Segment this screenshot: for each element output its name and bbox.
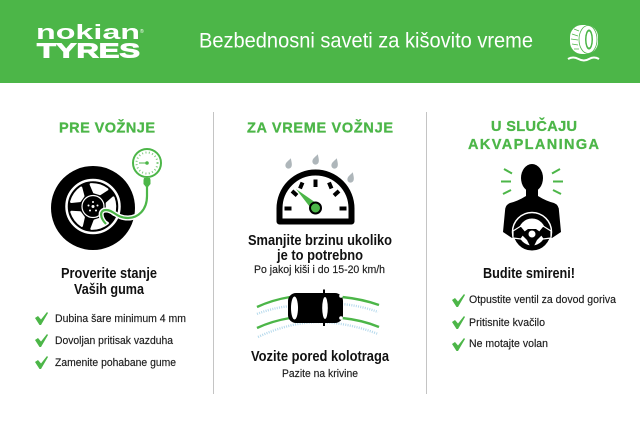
text: check your tyres: Proverite stanje bbox=[61, 265, 157, 282]
checklist: Dubina šare minimum 4 mm bbox=[55, 313, 186, 325]
text: check your tyres: Vaših guma bbox=[74, 281, 145, 298]
checklist: Otpustite ventil za dovod goriva bbox=[469, 294, 617, 306]
icon: tyre on water bbox=[568, 25, 599, 60]
text: reduce speed: je to potrebno bbox=[276, 247, 363, 264]
checklist bbox=[452, 294, 617, 351]
panel: before driving bbox=[35, 118, 186, 369]
icon: wheel with pressure gauge bbox=[51, 149, 161, 250]
checklist: Ne motajte volan bbox=[469, 338, 548, 350]
text: reduce speed bbox=[248, 232, 392, 276]
logo: Nokian Tyres: TYRES bbox=[37, 40, 140, 62]
heading: ZA VREME VOŽNJE: ZA VREME VOŽNJE bbox=[247, 118, 393, 136]
checklist: Zamenite pohabane gume bbox=[55, 357, 176, 369]
logo: Nokian Tyres: nokian bbox=[36, 22, 140, 44]
heading: U SLUČAJU AKVAPLANINGA: U SLUČAJU bbox=[491, 117, 577, 135]
panel: while driving bbox=[247, 118, 393, 380]
icon: driver holding steering wheel bbox=[501, 164, 563, 252]
heading: U SLUČAJU AKVAPLANINGA: AKVAPLANINGA bbox=[468, 137, 600, 153]
text: drive beside the ruts bbox=[251, 348, 390, 380]
heading: U SLUČAJU AKVAPLANINGA bbox=[468, 117, 600, 153]
text: check your tyres bbox=[61, 265, 157, 298]
text: stay calm: Budite smireni! bbox=[483, 265, 575, 282]
logo: Nokian Tyres bbox=[36, 22, 144, 62]
icon: car between wheel ruts bbox=[257, 290, 379, 337]
column dividers bbox=[214, 112, 426, 394]
checklist bbox=[35, 312, 186, 369]
header band bbox=[0, 0, 640, 83]
icon: speedometer with rain drops bbox=[280, 153, 356, 222]
text: reduce speed: Po jakoj kiši i do 15-20 km/h bbox=[254, 264, 385, 276]
checklist: Pritisnite kvačilo bbox=[469, 317, 545, 329]
text: drive beside the ruts: Pazite na krivine bbox=[282, 368, 358, 380]
heading: PRE VOŽNJE: PRE VOŽNJE bbox=[59, 118, 155, 136]
checklist: Dovoljan pritisak vazduha bbox=[55, 335, 174, 347]
text: drive beside the ruts: Vozite pored kolotraga bbox=[251, 348, 390, 365]
text: reduce speed: Smanjite brzinu ukoliko bbox=[248, 232, 392, 249]
logo: Nokian Tyres: ® bbox=[140, 28, 144, 35]
header title: Bezbednosni saveti za kišovito vreme bbox=[199, 30, 533, 52]
panel: in case of aquaplaning bbox=[452, 117, 617, 351]
